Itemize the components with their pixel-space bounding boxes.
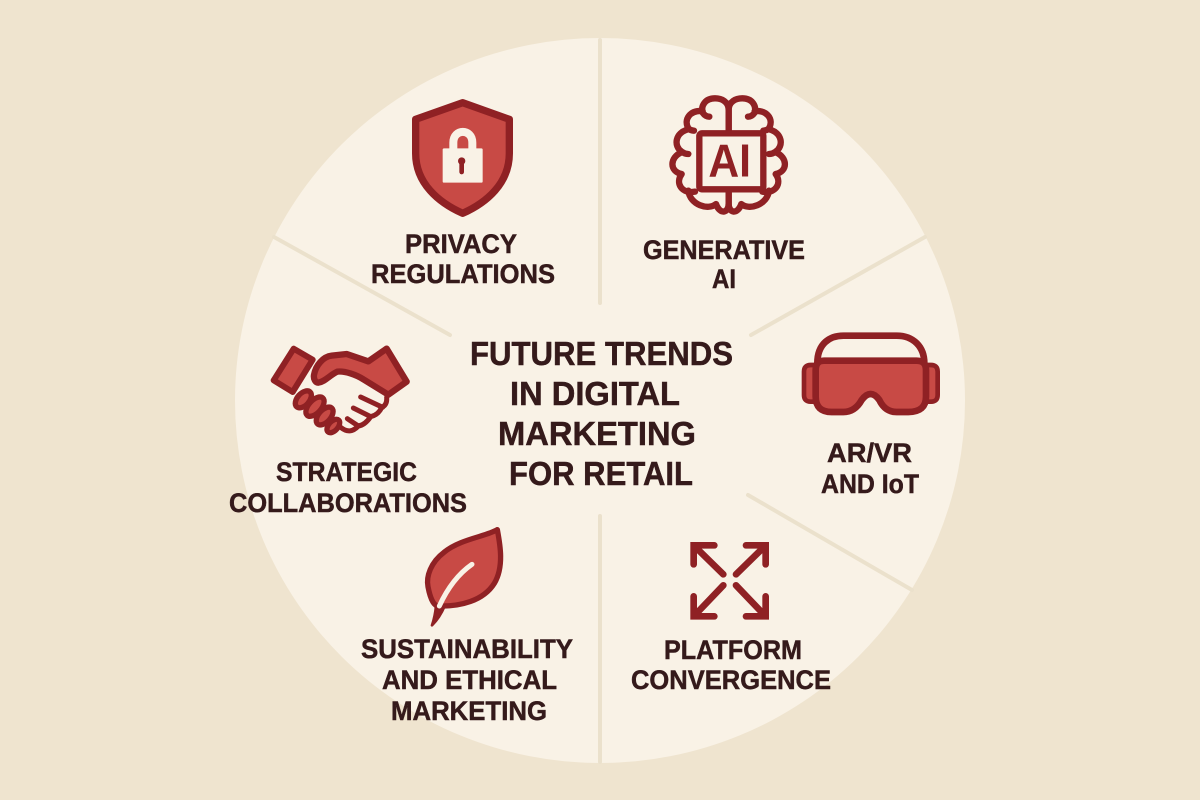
label: strategic collaborations: COLLABORATIONS bbox=[229, 488, 467, 518]
icon: shield with padlock bbox=[416, 103, 509, 213]
label: platform convergence: CONVERGENCE bbox=[631, 665, 831, 695]
icon: four expanding arrows bbox=[694, 545, 766, 616]
label: strategic collaborations bbox=[229, 457, 467, 518]
label: AR/VR and IoT bbox=[821, 438, 919, 499]
label: privacy regulations bbox=[371, 229, 555, 289]
title: MARKETING bbox=[498, 416, 696, 453]
label: AR/VR and IoT: AR/VR bbox=[827, 438, 912, 468]
icon: brain with AI chip: AI bbox=[708, 135, 751, 187]
label: AR/VR and IoT: AND IoT bbox=[821, 469, 919, 499]
label: platform convergence: PLATFORM bbox=[664, 635, 802, 665]
icon: handshake bbox=[274, 349, 407, 435]
label: privacy regulations: PRIVACY bbox=[405, 229, 517, 259]
label: platform convergence bbox=[631, 635, 831, 695]
icon: brain with AI chip bbox=[672, 98, 785, 212]
label: strategic collaborations: STRATEGIC bbox=[276, 457, 417, 487]
title: IN DIGITAL bbox=[510, 376, 680, 413]
label: sustainability and ethical marketing: SUSTAINABILITY bbox=[361, 634, 573, 664]
label: privacy regulations: REGULATIONS bbox=[371, 259, 555, 289]
label: generative AI bbox=[643, 235, 805, 294]
label: sustainability and ethical marketing: AND ETHICAL bbox=[382, 665, 557, 695]
panel: segmented circle bbox=[235, 38, 965, 763]
label: sustainability and ethical marketing bbox=[361, 634, 573, 726]
label: sustainability and ethical marketing: MARKETING bbox=[391, 696, 547, 726]
title bbox=[470, 336, 733, 493]
label: generative AI: GENERATIVE bbox=[643, 235, 805, 265]
icon: leaf bbox=[428, 530, 501, 625]
label: generative AI: AI bbox=[712, 264, 736, 294]
icon: VR goggles bbox=[804, 336, 938, 412]
title: FUTURE TRENDS bbox=[470, 336, 733, 373]
title: FOR RETAIL bbox=[509, 456, 693, 493]
